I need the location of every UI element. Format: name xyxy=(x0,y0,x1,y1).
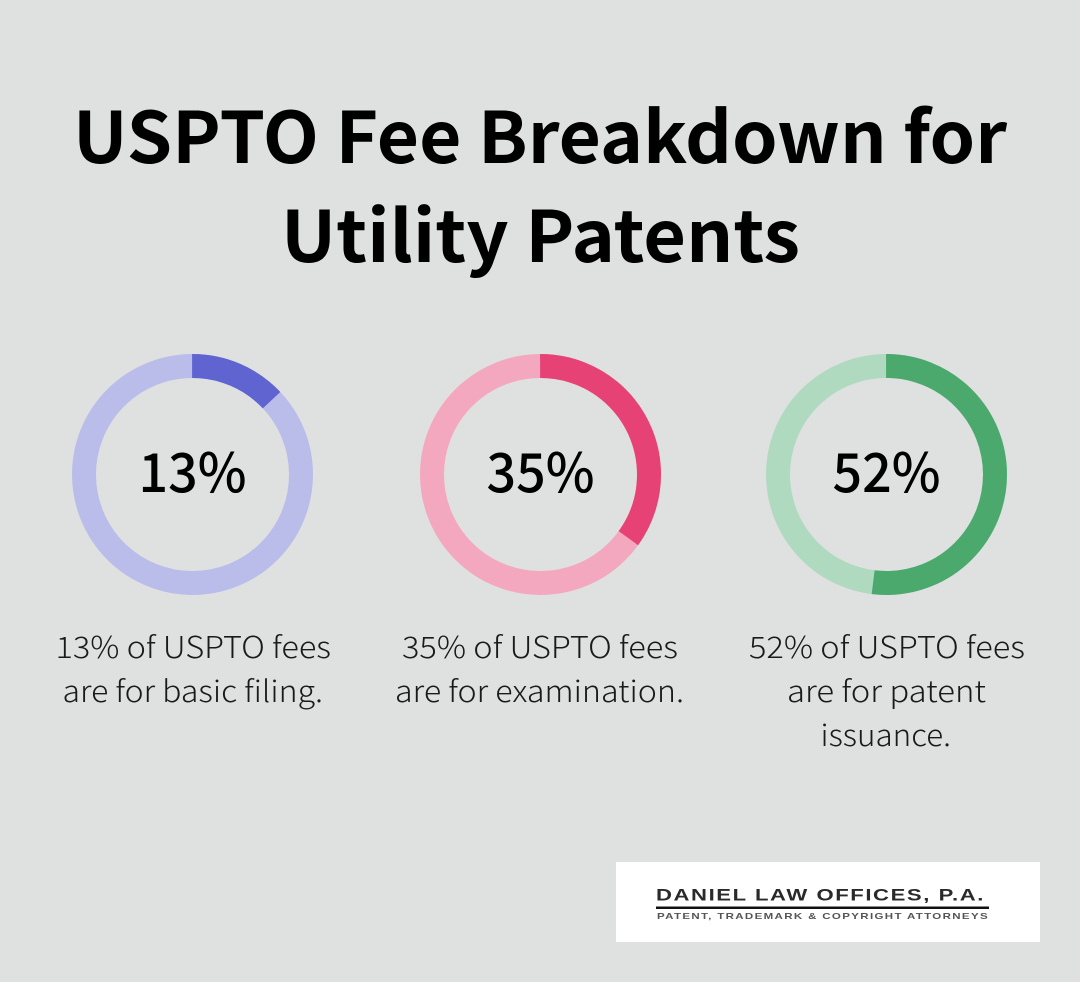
percentage: 13%: 13% xyxy=(138,429,246,508)
title: Utility Patents xyxy=(281,181,800,283)
donut chart: 13% xyxy=(84,366,301,583)
panel: basic filing 13% xyxy=(56,366,331,711)
caption: patent issuance xyxy=(749,623,1025,755)
donut chart: 52% xyxy=(778,366,995,583)
panel: patent issuance 52% xyxy=(749,366,1025,755)
donut chart: 35% xyxy=(432,366,649,583)
caption: patent issuance: are for patent xyxy=(787,667,986,711)
percentage: 52%: 52% xyxy=(832,429,940,508)
title xyxy=(73,82,1008,283)
caption: patent issuance: 52% of USPTO fees xyxy=(749,623,1025,667)
panel: examination 35% xyxy=(395,366,684,711)
caption: examination xyxy=(395,623,684,711)
percentage: 35%: 35% xyxy=(486,429,594,508)
caption: examination: are for examination. xyxy=(395,667,684,711)
caption: examination: 35% of USPTO fees xyxy=(402,623,678,667)
caption: patent issuance: issuance. xyxy=(820,711,951,755)
caption: basic filing: are for basic filing. xyxy=(62,667,323,711)
title: USPTO Fee Breakdown for xyxy=(73,82,1008,184)
logo: Daniel Law Offices: PATENT, TRADEMARK & COPYRIGHT ATTORNEYS xyxy=(657,911,989,921)
logo: Daniel Law Offices xyxy=(616,862,1040,942)
caption: basic filing: 13% of USPTO fees xyxy=(56,623,331,667)
caption: basic filing xyxy=(56,623,331,711)
logo: Daniel Law Offices: DANIEL LAW OFFICES, P.A. xyxy=(656,886,985,904)
